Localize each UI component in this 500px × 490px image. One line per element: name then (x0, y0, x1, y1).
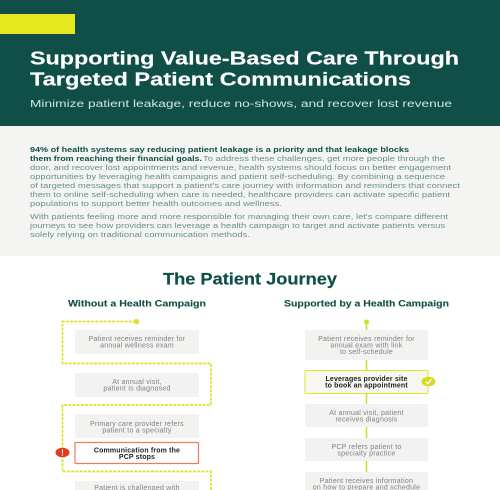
icon: warning (56, 448, 70, 458)
step: referral: Primary care provider refers (90, 421, 184, 428)
step: provider site: Leverages provider site (325, 376, 408, 383)
title: Targeted Patient Communications (30, 68, 411, 90)
step: annual visit: patient is diagnosed (103, 386, 171, 392)
step: annual visit: At annual visit, (112, 379, 162, 386)
step: reminder with link: Patient receives reminder for (318, 336, 415, 343)
step: reminder: annual wellness exam (100, 342, 174, 350)
step: referral (75, 414, 199, 438)
panel: header (0, 0, 500, 126)
intro paragraph: opportunities by leveraging health campaigns and patient self-scheduling. By combining a sequence (30, 174, 445, 181)
step: prepare information: Patient receives information (320, 478, 413, 485)
step: reminder with link: annual exam with link (330, 342, 403, 350)
panel: introduction (0, 126, 500, 256)
intro paragraph: To address these challenges, get more people through the (203, 156, 445, 163)
step: provider site: to book an appointment (325, 382, 408, 389)
intro paragraph: door, and recover lost appointments and revenue, health systems should focus on better engagement (30, 165, 451, 172)
step: specialty referral (305, 438, 428, 461)
intro paragraph: populations to support better health outcomes and wellness. (30, 201, 282, 208)
connector line (364, 320, 369, 472)
step: annual visit (75, 373, 199, 397)
subheading: Supported by a Health Campaign (284, 298, 449, 308)
icon: check (422, 377, 436, 386)
column: without a health campaign (56, 298, 211, 490)
heading: The Patient Journey: The Patient Journey (163, 270, 338, 288)
dashed journey path (62, 319, 211, 490)
second paragraph: journeys to see how providers can leverage a health campaign to target and activate patients versus (29, 223, 446, 230)
second paragraph: With patients feeling more and more responsible for managing their own care, let's compare different (30, 214, 448, 221)
step: communication stops: Communication from the (94, 448, 180, 454)
title (30, 48, 459, 90)
step: diagnosis: receives diagnosis (335, 416, 398, 424)
step: provider site (305, 370, 428, 394)
step: communication stops: PCP stops (119, 454, 155, 461)
subheading: Without a Health Campaign (68, 298, 206, 308)
icon: warning: ! (61, 448, 64, 458)
column: supported by a health campaign (284, 298, 449, 490)
intro paragraph: of targeted messages that support a patient's care journey with information and reminders that connect (30, 183, 460, 190)
intro paragraph: 94% of health systems say reducing patient leakage is a priority and that leakage blocks (30, 147, 409, 154)
title: Supporting Value-Based Care Through (30, 48, 459, 68)
step: specialty referral: PCP refers patient to (331, 444, 402, 451)
step: reminder: Patient receives reminder for (89, 336, 186, 343)
second paragraph (29, 214, 448, 239)
step: communication stops (75, 442, 198, 464)
step: diagnosis: At annual visit, patient (329, 410, 404, 417)
step: reminder with link (305, 330, 428, 360)
step: referral: patient to a specialty (102, 428, 172, 434)
step: specialty referral: specialty practice (337, 450, 396, 458)
step: diagnosis (305, 404, 428, 427)
step: prepare information (305, 472, 428, 490)
step: patient challenged (75, 481, 199, 490)
step: reminder with link: to self-schedule (340, 349, 393, 356)
yellow accent tab (0, 14, 75, 34)
intro paragraph: them from reaching their financial goals. (30, 156, 202, 163)
subtitle: Minimize patient leakage, reduce no-shows, and recover lost revenue (30, 99, 453, 110)
intro paragraph: them to online self-scheduling when care is needed, healthcare providers can activate specific patient (30, 192, 450, 199)
second paragraph: solely relying on traditional communication methods. (30, 232, 250, 239)
step: reminder (75, 330, 199, 354)
intro paragraph (30, 147, 460, 208)
